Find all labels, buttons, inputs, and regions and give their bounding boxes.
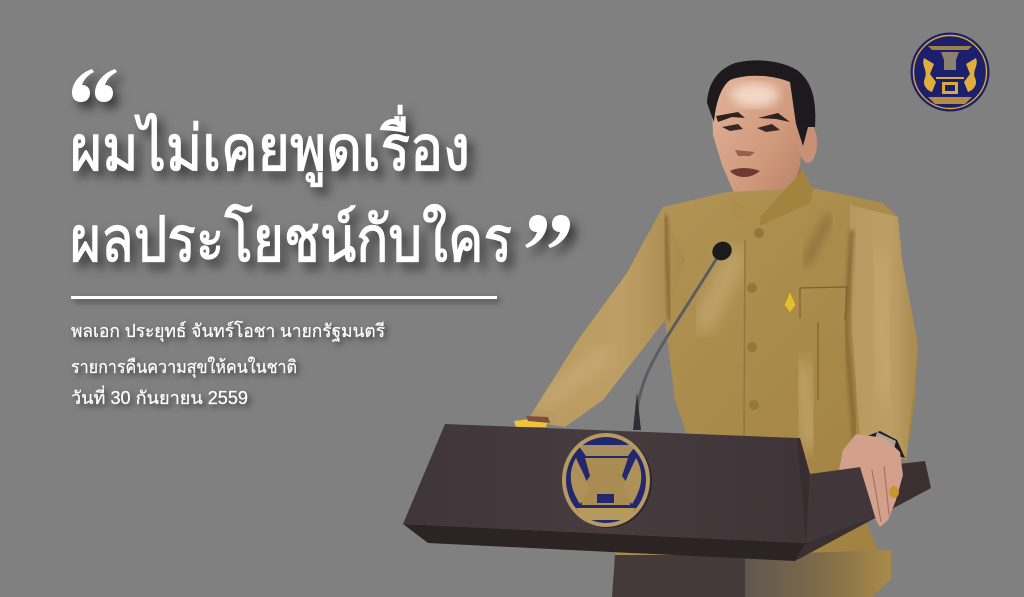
icon: government seal logo: [910, 32, 990, 112]
buttons: [754, 228, 764, 238]
hair: [707, 60, 815, 146]
quote heading: [70, 69, 570, 275]
lapel pin: [784, 291, 796, 313]
speaker name: พลเอก ประยุทธ์ จันทร์โอชา นายกรัฐมนตรี: [71, 320, 385, 342]
cuff and left hand: [514, 416, 550, 427]
podium base: [612, 555, 745, 597]
ring: [889, 486, 899, 498]
opening quotation mark: [72, 69, 117, 102]
podium underside: [403, 524, 806, 561]
gold jacket: [527, 170, 918, 597]
podium: [403, 424, 931, 597]
podium side wing: [795, 461, 931, 561]
divider rule: [71, 296, 497, 299]
neck and head: [707, 60, 817, 225]
date: วันที่ 30 กันยายน 2559: [71, 385, 248, 408]
programme name: รายการคืนความสุขให้คนในชาติ: [71, 356, 297, 378]
right hand on podium: [839, 431, 905, 527]
photo: speaker: [514, 60, 918, 597]
podium front: [403, 424, 806, 543]
source text block: [71, 320, 385, 408]
microphone: [633, 238, 735, 430]
collar: [730, 170, 813, 227]
sleeves and folds: [530, 234, 658, 427]
closing quotation mark: [525, 215, 570, 248]
heading line 1: ผมไม่เคยพูดเรื่อง: [70, 105, 470, 187]
podium seal: [562, 433, 652, 528]
facial features: [716, 112, 790, 177]
breast pocket: [800, 287, 847, 400]
heading line 2: ผลประโยชน์กับใคร: [70, 204, 512, 275]
